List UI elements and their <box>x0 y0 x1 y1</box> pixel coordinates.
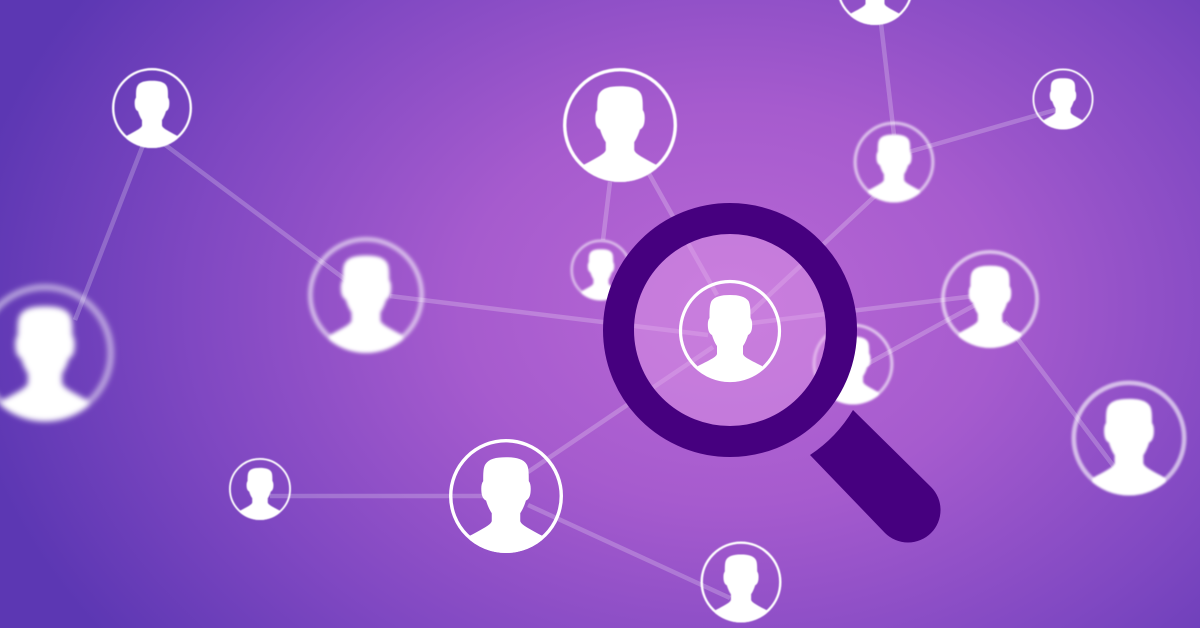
handle <box>810 410 941 543</box>
person node: top right small <box>1033 69 1093 136</box>
person node: top left <box>113 69 191 156</box>
focused person <box>680 282 780 391</box>
lens ring <box>618 218 842 442</box>
person node: right of lens <box>943 252 1037 358</box>
person node: bottom centre <box>451 441 561 564</box>
person node: small, left of lens <box>572 241 630 307</box>
person node: top edge cropped <box>838 0 912 33</box>
person node: bottom left small <box>230 459 290 526</box>
person node: behind lens rim <box>814 325 892 413</box>
person node: top centre <box>565 70 675 193</box>
person node: left centre blurred <box>310 239 422 365</box>
person node: far left large blurred <box>0 287 111 435</box>
person node: far right <box>1074 383 1184 507</box>
person node: bottom <box>702 543 780 628</box>
lens glass <box>632 232 828 428</box>
magnifying glass <box>618 218 941 543</box>
person node: upper right <box>855 123 933 211</box>
